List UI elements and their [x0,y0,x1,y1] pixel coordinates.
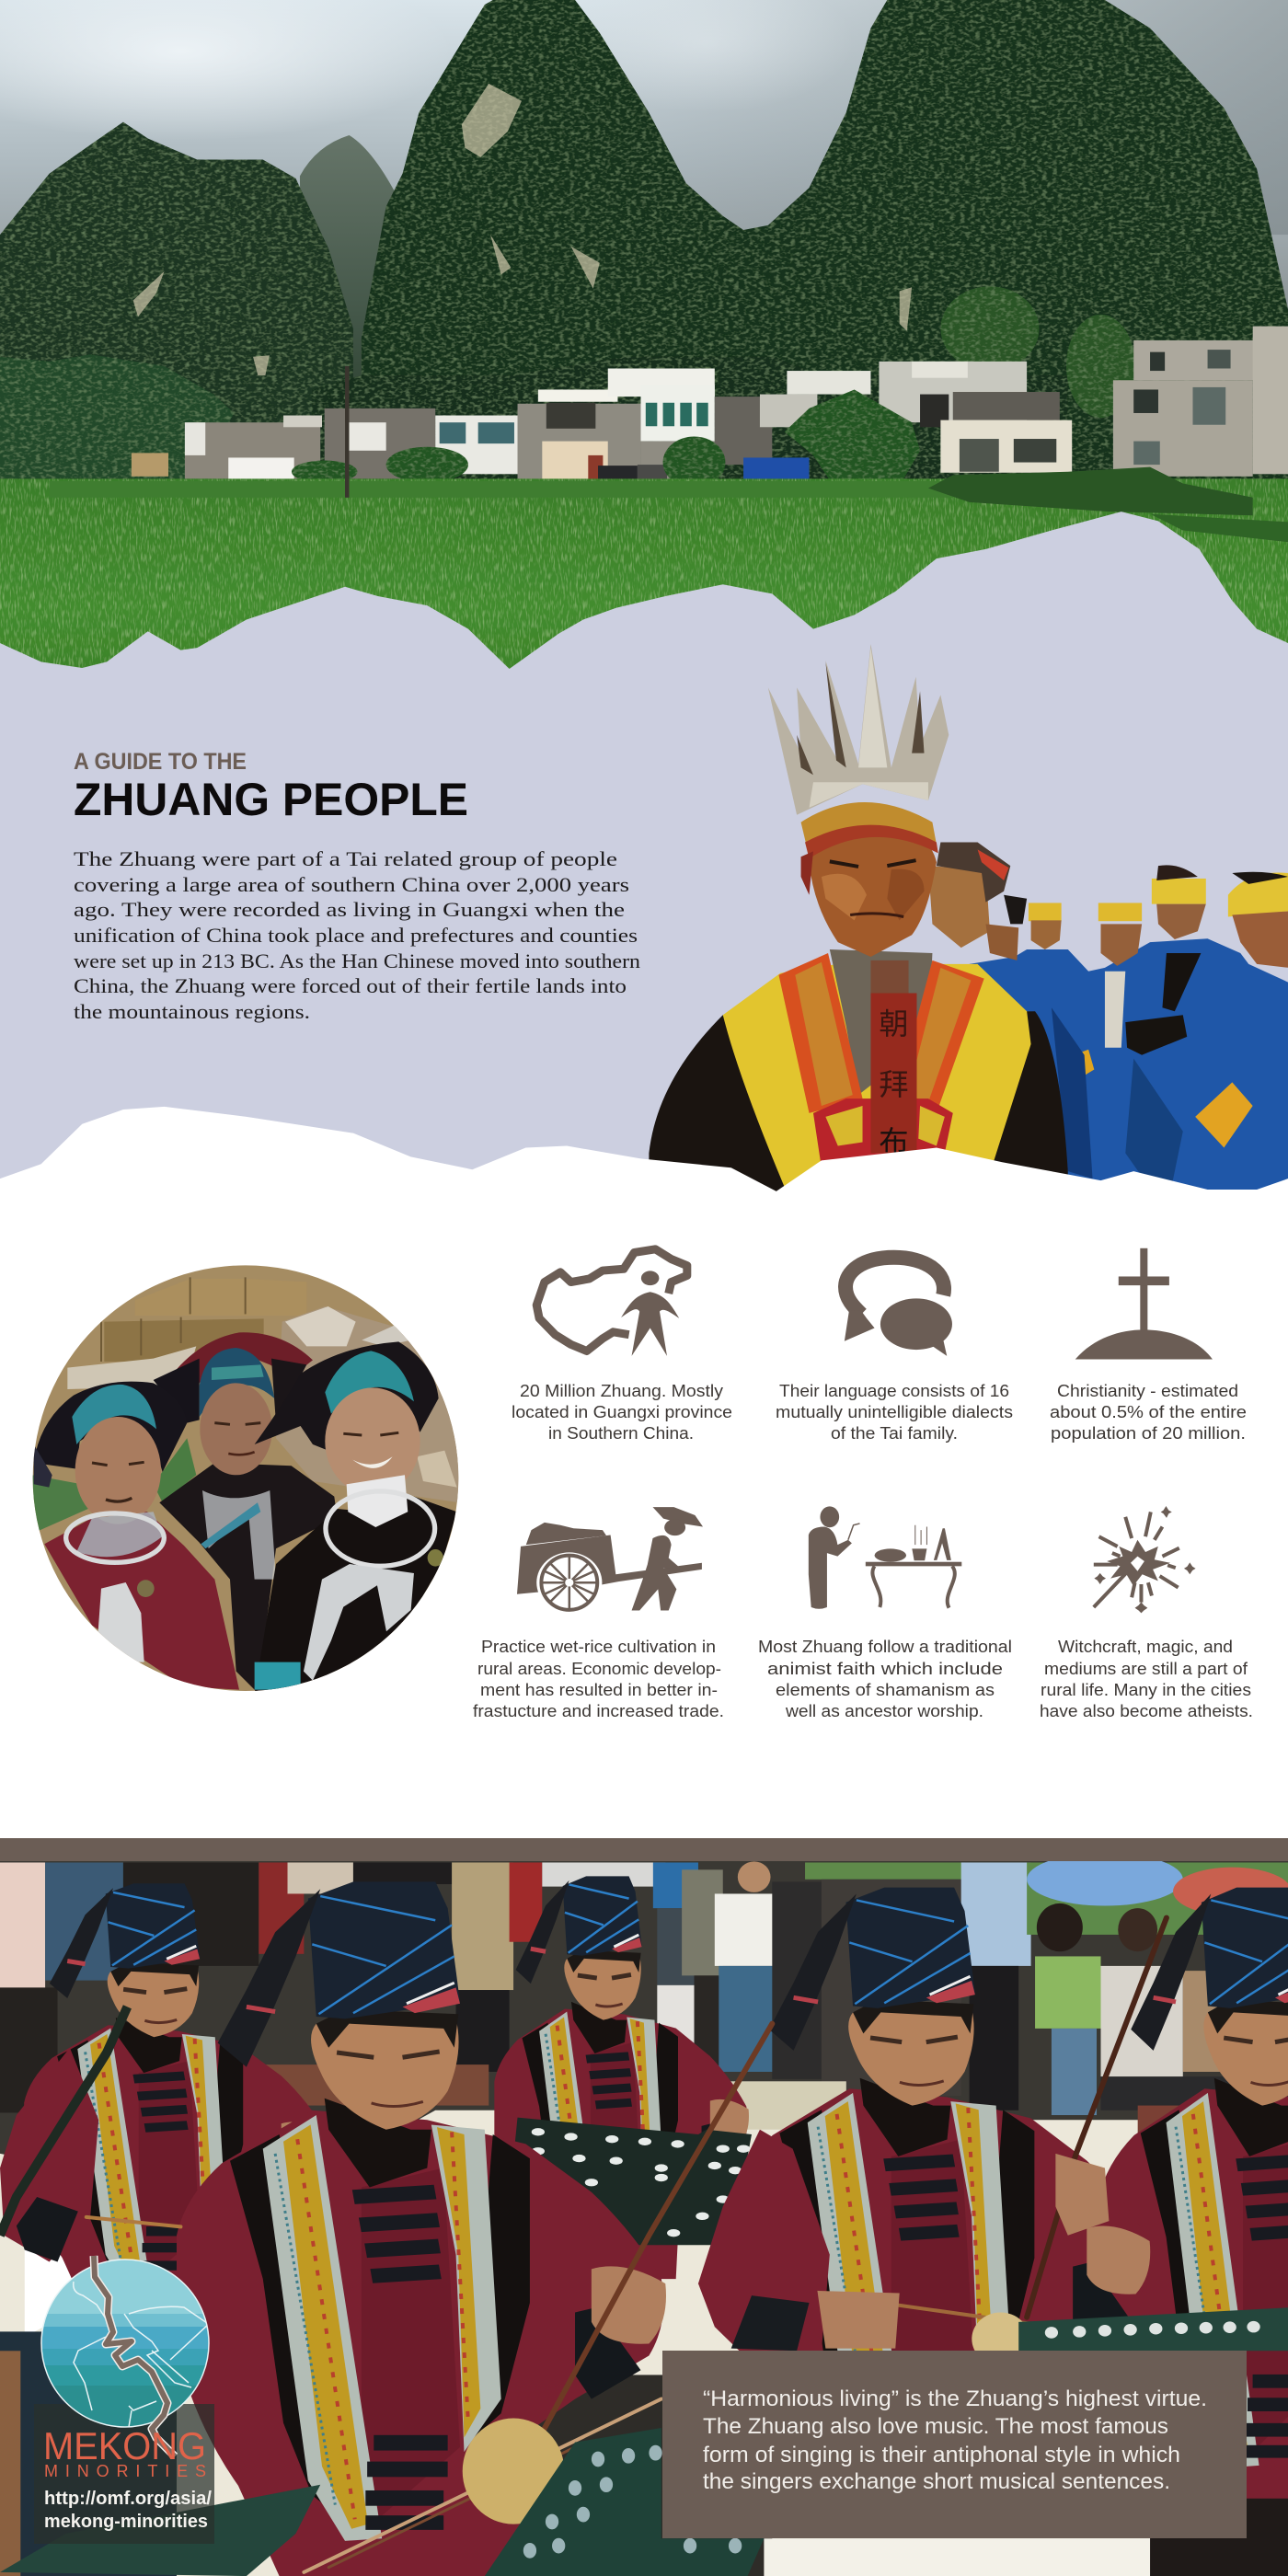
logo url [44,2489,212,2532]
gourd resonators [463,2419,564,2524]
caption: animist faith: Most Zhuang follow a traditional [758,1637,1012,1656]
main man with feather headdress [649,644,1068,1214]
logo wordmark: MEKONG [43,2424,206,2467]
caption: Christianity: population of 20 million. [1051,1423,1246,1443]
caption: animist faith [758,1637,1012,1720]
caption: Christianity [1050,1381,1247,1443]
ground and benches [0,2064,1288,2576]
callout: Harmonious living: “Harmonious living” is the Zhuang’s highest virtue. [703,2386,1207,2411]
left woman [34,1382,239,1690]
front musician left [177,1881,666,2576]
divider bar [0,1838,1288,1861]
distant mountain [300,135,394,378]
caption: wet-rice cultivation: Practice wet-rice cultivation in [481,1637,716,1656]
group of Zhuang men illustration [649,644,1288,1214]
caption: animist faith: well as ancestor worship. [785,1701,983,1720]
music stand: back [513,2118,752,2245]
shirt [830,949,932,1095]
caption: witchcraft: have also become atheists. [1040,1701,1253,1720]
intro text block: ago. They were recorded as living in Guangxi when the [74,898,625,921]
caption: population: 20 Million Zhuang. Mostly [520,1381,724,1400]
caption: wet-rice cultivation [473,1637,724,1720]
caption: language: Their language consists of 16 [779,1381,1009,1400]
caption: language [776,1381,1013,1443]
rice field [0,478,1288,669]
caption: animist faith: elements of shamanism as [776,1680,995,1699]
hand on instrument [1055,2154,1109,2236]
callout: Harmonious living: form of singing is their antiphonal style in which [703,2443,1180,2467]
mountains [0,0,1288,484]
icon block: China map and person [536,1249,687,1356]
caption: population: in Southern China. [548,1423,694,1443]
intro text block: the mountainous regions. [74,1000,310,1023]
intro text block: The Zhuang were part of a Tai related group of people [74,847,617,870]
wooden tablet [870,960,909,996]
red strip with characters: 拜 [879,1068,909,1101]
red strip with characters [870,993,916,1159]
right woman [255,1341,457,1693]
feathers [768,644,949,815]
caption: witchcraft: Witchcraft, magic, and [1058,1637,1233,1656]
caption: Christianity: about 0.5% of the entire [1050,1402,1247,1421]
logo subtitle: MINORITIES [44,2462,206,2480]
caption: population [512,1381,732,1443]
icon: person at ancestor altar [809,1506,961,1609]
background photo: karst mountains, village and rice field [0,0,1288,736]
panel: lavender intro section [0,512,1288,1221]
caption: witchcraft [1040,1637,1253,1720]
logo url: http://omf.org/asia/ [44,2489,212,2509]
chest emblem [813,1098,953,1167]
icon: cross on hill [1075,1248,1213,1359]
right musician sleeve and cuff [698,2130,830,2351]
caption: witchcraft: mediums are still a part of [1044,1659,1248,1678]
icon: speech bubbles [845,1258,952,1356]
title: Zhuang People: ZHUANG PEOPLE [74,774,468,825]
caption: Christianity: Christianity - estimated [1057,1381,1238,1400]
logo url: mekong-minorities [44,2512,208,2532]
caption: animist faith: animist faith which include [767,1659,1003,1678]
icon: farmer with cart [517,1507,703,1613]
blue-robed men [928,842,1288,1214]
mic stand [0,2007,127,2236]
logo globe [37,2254,221,2456]
intro text block: unification of China took place and prefectures and counties [74,924,638,947]
logo backing panel [34,2404,214,2544]
caption: wet-rice cultivation: frastucture and increased trade. [473,1701,724,1720]
photo: Zhuang musicians [0,1853,1288,2576]
icon: person [621,1271,679,1356]
icon: magic sparks [1094,1506,1196,1613]
face [810,826,937,957]
black robe [649,1011,1068,1214]
heading: a guide to the: A GUIDE TO THE [74,749,247,775]
intro text block: were set up in 213 BC. As the Han Chinese moved into southern [74,949,640,972]
hat band [801,802,938,857]
intro text block: covering a large area of southern China over 2,000 years [74,873,629,896]
callout: Harmonious living [662,2351,1247,2538]
icon: map outline [536,1249,687,1351]
caption: witchcraft: rural life. Many in the cities [1041,1680,1251,1699]
caption: population: located in Guangxi province [512,1402,732,1421]
red strip with characters: 朝 [879,1007,909,1041]
caption: language: of the Tai family. [831,1423,958,1443]
music stands: front [0,2307,1288,2576]
back left sleeve [0,2048,98,2262]
village houses [132,327,1288,484]
back row musicians [494,1876,749,2279]
crowd background [0,1853,1288,2158]
callout: Harmonious living: the singers exchange short musical sentences. [703,2469,1170,2494]
yellow vest [723,964,1031,1214]
circular photo: three Zhuang women [30,1263,460,1693]
panel: white section with torn edge [0,1107,1288,1244]
limestone cliff patches [133,84,912,375]
logo: Mekong Minorities [34,2254,221,2544]
middle woman [154,1332,338,1693]
intro text block: China, the Zhuang were forced out of their fertile lands into [74,974,627,997]
caption: wet-rice cultivation: ment has resulted in better in- [480,1680,718,1699]
caption: language: mutually unintelligible dialects [776,1402,1013,1421]
embroidered bands [778,953,863,1113]
caption: wet-rice cultivation: rural areas. Economic develop- [477,1659,721,1678]
front musician right [771,1888,1150,2351]
banana tree and shrubs [291,390,920,478]
red strip with characters: 布 [879,1126,909,1159]
erhu instruments and bows [86,1918,1167,2572]
foreground trees [0,286,1135,484]
callout: Harmonious living: The Zhuang also love music. The most famous [703,2414,1168,2439]
sky [0,0,1288,309]
intro text block [74,847,640,1023]
